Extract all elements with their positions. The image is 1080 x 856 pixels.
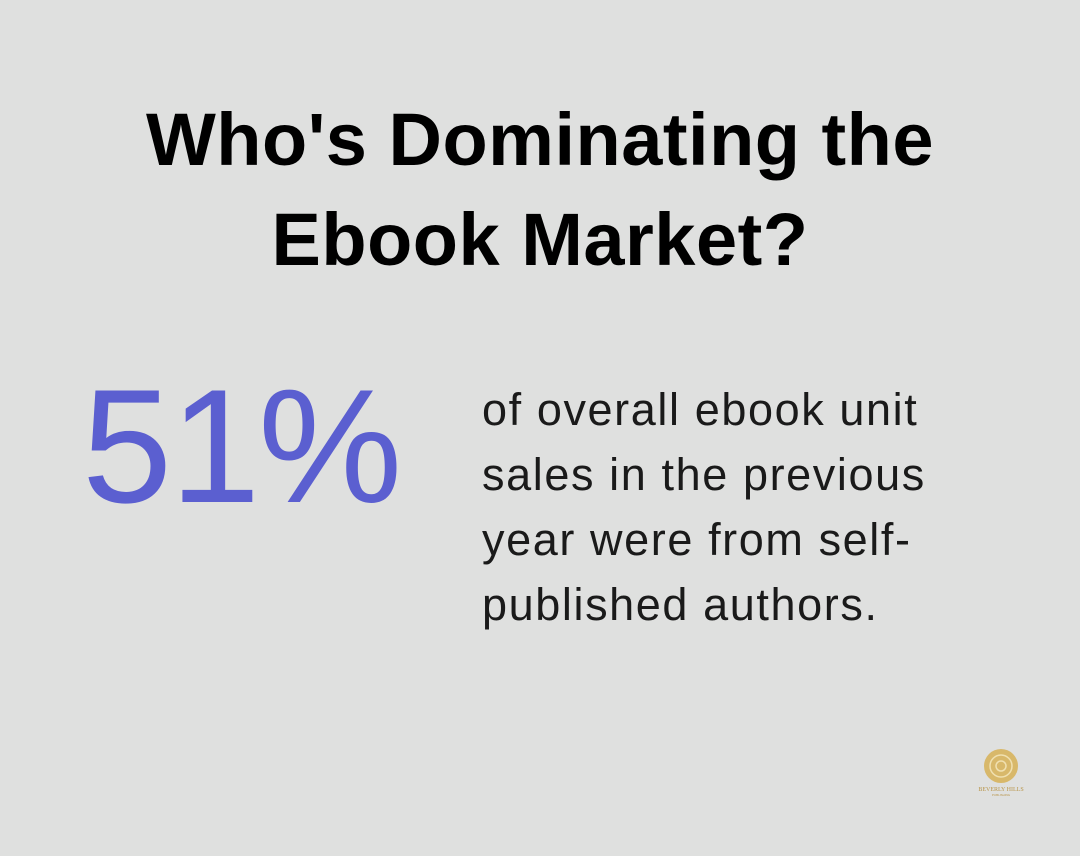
logo: Beverly Hills Publishing xyxy=(978,749,1024,797)
title xyxy=(146,98,934,281)
description text xyxy=(482,384,926,630)
title: Ebook Market? xyxy=(272,198,808,281)
description text: year were from self- xyxy=(482,514,912,565)
description text: of overall ebook unit xyxy=(482,384,918,435)
title: Who's Dominating the xyxy=(146,98,934,181)
description text: published authors. xyxy=(482,579,879,630)
logo: Beverly Hills Publishing: PUBLISHING xyxy=(992,793,1010,797)
description text: sales in the previous xyxy=(482,449,926,500)
big statistic: 51% xyxy=(82,356,400,537)
logo: Beverly Hills Publishing: BEVERLY HILLS xyxy=(978,787,1024,793)
